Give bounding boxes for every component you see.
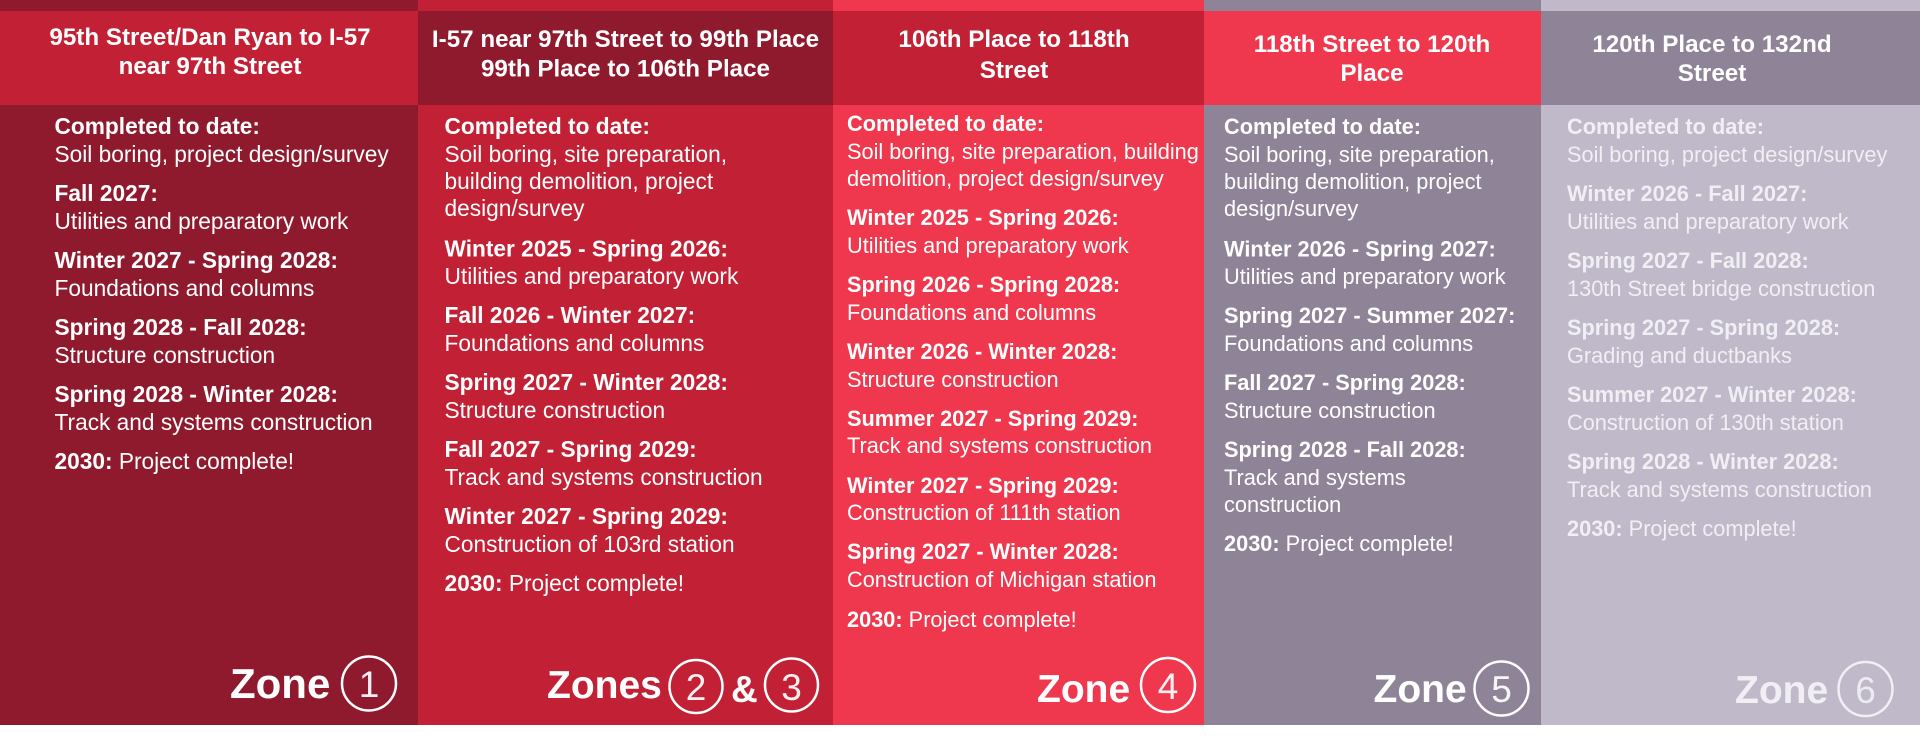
entry: completed to date: Completed to date:: [847, 111, 1044, 136]
entry: completed to date: Completed to date:: [54, 113, 260, 139]
entry: completed to date: design/survey: [1224, 196, 1358, 221]
entry: winter 2025 to spring 2026: Utilities and preparatory work: [444, 263, 739, 289]
panel: zone 1: [0, 0, 418, 725]
zone badge: zone 6: 6: [1855, 670, 1876, 711]
entry: spring 2028 to winter 2028: Track and systems construction: [1567, 477, 1872, 502]
header: zones 2 and 3 location: [418, 11, 833, 105]
entry: spring 2028 to winter 2028: Track and systems construction: [54, 409, 373, 435]
entry: winter 2026 to spring 2027: Winter 2026 - Spring 2027:: [1224, 236, 1496, 262]
entry: winter 2026 to winter 2028: Winter 2026 - Winter 2028:: [847, 339, 1117, 364]
entry: spring 2028 to winter 2028: Spring 2028 - Winter 2028:: [1567, 449, 1839, 474]
panel: zone 5: [1204, 0, 1541, 725]
entry: completed to date: Completed to date:: [444, 113, 650, 139]
entry: spring 2027 to winter 2028: Construction of Michigan station: [847, 567, 1156, 592]
entry: completed to date: building demolition, project: [1224, 169, 1482, 194]
zone badge: zone 5: Zone: [1374, 668, 1467, 711]
entry: fall 2027 to spring 2029: Fall 2027 - Spring 2029:: [444, 436, 697, 462]
schedule: zones 2 and 3: [444, 113, 763, 596]
header: zone 5 location: 118th Street to 120th: [1254, 31, 1490, 58]
panel: zones 2 and 3: [418, 0, 833, 725]
header: zone 1 location: 95th Street/Dan Ryan to I-57: [49, 24, 371, 51]
entry: winter 2027 to spring 2029: Winter 2027 - Spring 2029:: [847, 473, 1119, 498]
entry: completed to date: Completed to date:: [1224, 114, 1421, 139]
entry: spring 2027 to fall 2028: Spring 2027 - Fall 2028:: [1567, 248, 1809, 273]
header: zone 4 location: Street: [980, 57, 1048, 84]
zone badge: zone 5: [1374, 662, 1528, 716]
header: zones 2 and 3 location: I-57 near 97th Street to 99th Place: [432, 26, 819, 53]
header: zone 5 location: Place: [1340, 60, 1404, 87]
entry: winter 2025 to spring 2026: Winter 2025 - Spring 2026:: [847, 205, 1119, 230]
entry: spring 2028 to fall 2028: Structure construction: [54, 342, 275, 368]
header: zones 2 and 3 location: 99th Place to 106th Place: [481, 56, 770, 82]
entry: winter 2025 to spring 2026: Winter 2025 - Spring 2026:: [444, 236, 728, 262]
header: zone 4 location: [833, 11, 1204, 105]
zone badge: zones 2 and 3: 2: [686, 667, 706, 708]
entry: winter 2026 to fall 2027: Winter 2026 - Fall 2027:: [1567, 181, 1807, 206]
entry: winter 2027 to spring 2029: Winter 2027 - Spring 2029:: [444, 503, 728, 529]
entry: winter 2027 to spring 2029: Construction of 103rd station: [444, 531, 735, 557]
zone badge: zone 5: 5: [1491, 669, 1512, 710]
entry: completed to date: building demolition, project: [444, 168, 714, 194]
zone badge: zone 1: 1: [359, 664, 379, 705]
entry: spring 2026 to spring 2028: Spring 2026 - Spring 2028:: [847, 272, 1120, 297]
header: zone 6 location: 120th Place to 132nd: [1592, 31, 1832, 58]
entry: completed to date: design/survey: [444, 195, 585, 221]
entry: spring 2027 to fall 2028: 130th Street bridge construction: [1567, 276, 1875, 301]
entry: summer 2027 to spring 2029: Track and systems construction: [847, 433, 1152, 458]
entry: fall 2027: Fall 2027:: [54, 180, 158, 206]
zone badge: zone 6: [1735, 662, 1892, 716]
header: zone 6 location: Street: [1678, 60, 1746, 87]
entry: spring 2027 to winter 2028: Spring 2027 - Winter 2028:: [847, 539, 1119, 564]
entry: fall 2026 to winter 2027: Fall 2026 - Winter 2027:: [444, 302, 695, 328]
entry: completed to date: Soil boring, site preparation,: [1224, 142, 1495, 167]
entry: winter 2026 to winter 2028: Structure construction: [847, 367, 1059, 392]
panel: zone 4: [833, 0, 1204, 725]
entry: completed to date: Completed to date:: [1567, 114, 1764, 139]
header: zone 5 location: [1204, 11, 1541, 105]
header: zone 6 location: [1541, 11, 1920, 105]
entry: spring 2027 to summer 2027: Spring 2027 - Summer 2027:: [1224, 303, 1515, 328]
entry: spring 2028 to fall 2028: Spring 2028 - Fall 2028:: [54, 314, 307, 340]
entry: spring 2028 to fall 2028: construction: [1224, 492, 1341, 517]
zone badge: zones 2 and 3: &: [731, 669, 758, 710]
entry: project complete: 2030: Project complete!: [54, 448, 294, 474]
entry: winter 2027 to spring 2028: Foundations and columns: [54, 275, 314, 301]
schedule: zone 4: [847, 111, 1199, 632]
entry: spring 2027 to winter 2028: Structure construction: [444, 397, 665, 423]
entry: fall 2027: Utilities and preparatory work: [54, 208, 349, 234]
entry: project complete: 2030: Project complete!: [847, 607, 1077, 632]
entry: spring 2027 to winter 2028: Spring 2027 - Winter 2028:: [444, 369, 728, 395]
entry: completed to date: Soil boring, site preparation,: [444, 141, 727, 167]
entry: spring 2027 to spring 2028: Grading and ductbanks: [1567, 343, 1792, 368]
zone badge: zones 2 and 3: 3: [781, 667, 802, 708]
entry: project complete: 2030: Project complete!: [1224, 531, 1454, 556]
entry: spring 2028 to fall 2028: Track and systems: [1224, 465, 1406, 490]
entry: fall 2027 to spring 2029: Track and systems construction: [444, 464, 763, 490]
entry: fall 2027 to spring 2028: Structure construction: [1224, 398, 1436, 423]
entry: completed to date: Soil boring, site preparation, building: [847, 139, 1199, 164]
schedule: zone 6: [1567, 114, 1888, 541]
entry: winter 2025 to spring 2026: Utilities and preparatory work: [847, 233, 1129, 258]
zone badge: zone 4: 4: [1158, 666, 1178, 707]
entry: spring 2027 to spring 2028: Spring 2027 - Spring 2028:: [1567, 315, 1840, 340]
entry: completed to date: demolition, project design/survey: [847, 166, 1164, 191]
entry: spring 2026 to spring 2028: Foundations and columns: [847, 300, 1096, 325]
entry: spring 2027 to summer 2027: Foundations and columns: [1224, 331, 1473, 356]
entry: winter 2027 to spring 2028: Winter 2027 - Spring 2028:: [54, 247, 338, 273]
entry: summer 2027 to winter 2028: Summer 2027 - Winter 2028:: [1567, 382, 1857, 407]
entry: fall 2026 to winter 2027: Foundations and columns: [444, 330, 704, 356]
entry: spring 2028 to winter 2028: Spring 2028 - Winter 2028:: [54, 381, 338, 407]
header: zone 1 location: near 97th Street: [119, 53, 301, 80]
entry: winter 2026 to fall 2027: Utilities and preparatory work: [1567, 209, 1849, 234]
panel: zone 6: [1541, 0, 1920, 725]
schedule: zone 5: [1224, 114, 1515, 556]
zone badge: zones 2 and 3: [547, 658, 818, 713]
entry: project complete: 2030: Project complete!: [444, 570, 684, 596]
entry: winter 2026 to spring 2027: Utilities and preparatory work: [1224, 264, 1506, 289]
entry: fall 2027 to spring 2028: Fall 2027 - Spring 2028:: [1224, 370, 1466, 395]
entry: spring 2028 to fall 2028: Spring 2028 - Fall 2028:: [1224, 437, 1466, 462]
header: zone 4 location: 106th Place to 118th: [898, 26, 1130, 53]
zone badge: zone 4: Zone: [1037, 668, 1130, 711]
schedule: zone 1: [54, 113, 389, 474]
header: zone 1 location: [0, 11, 418, 105]
zone badge: zone 1: [230, 656, 396, 710]
zone badge: zones 2 and 3: Zones: [547, 664, 662, 707]
entry: completed to date: Soil boring, project design/survey: [54, 141, 389, 167]
zone badge: zone 6: Zone: [1735, 669, 1828, 712]
entry: summer 2027 to winter 2028: Construction of 130th station: [1567, 410, 1844, 435]
zone badge: zone 1: Zone: [230, 660, 330, 707]
entry: project complete: 2030: Project complete!: [1567, 516, 1797, 541]
entry: winter 2027 to spring 2029: Construction of 111th station: [847, 500, 1121, 525]
entry: completed to date: Soil boring, project design/survey: [1567, 142, 1888, 167]
entry: summer 2027 to spring 2029: Summer 2027 - Spring 2029:: [847, 406, 1138, 431]
zone badge: zone 4: [1037, 658, 1195, 712]
